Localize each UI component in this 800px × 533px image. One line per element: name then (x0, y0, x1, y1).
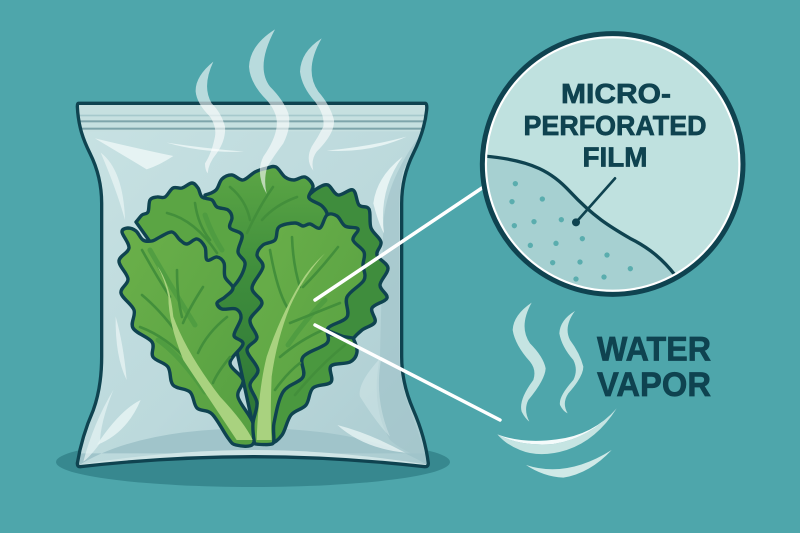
bag body (77, 103, 428, 467)
label: water vapor: VAPOR (597, 366, 711, 404)
bag highlights (83, 137, 407, 462)
illustration: plastic bag (70, 103, 437, 470)
water vapor wisps (497, 303, 617, 478)
label: water vapor: WATER (597, 330, 711, 368)
lens fill (484, 36, 741, 292)
vapor arc small (526, 450, 612, 478)
wisp left (513, 303, 546, 422)
back left leaf (136, 183, 245, 288)
lettuce (119, 166, 388, 446)
bag floor (77, 428, 430, 467)
broad leaf shadows (150, 215, 325, 392)
lens ring (482, 34, 743, 294)
label: water vapor (597, 330, 711, 404)
bag outline (77, 103, 428, 467)
pointer line to vapor (315, 325, 500, 420)
film callout line (572, 178, 615, 226)
center leaf (205, 166, 328, 430)
perforated film area (483, 156, 675, 303)
label: micro-perforated film: FILM (582, 142, 648, 172)
bag zip seal (80, 105, 425, 131)
bag interior details (70, 103, 437, 470)
lettuce ribs (157, 253, 325, 440)
front right leaf (247, 214, 365, 445)
bag shadow (56, 437, 450, 487)
wisp right (559, 311, 583, 413)
bag right side shading (379, 138, 418, 432)
front left leaf (119, 228, 255, 446)
label: micro-perforated film (524, 78, 706, 172)
label: micro-perforated film: MICRO- (561, 78, 671, 109)
magnifier lens: micro-perforated film (482, 34, 743, 303)
leaf veins (140, 187, 345, 395)
back right leaf (300, 185, 388, 340)
label: micro-perforated film: PERFORATED (524, 110, 706, 141)
lower right leaf (262, 330, 357, 444)
pointer line to film (315, 188, 482, 300)
vapor arc large (497, 408, 617, 454)
steam rising from bag (196, 29, 334, 194)
perforation dots (509, 181, 633, 282)
